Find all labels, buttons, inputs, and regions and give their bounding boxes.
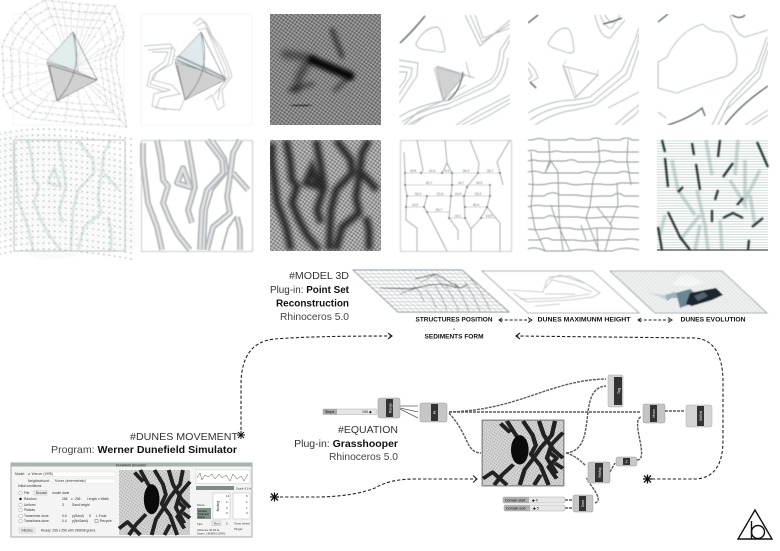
panel: row 2 network with measured distances: 14.7: [458, 181, 464, 185]
node: surface grid: [686, 405, 712, 427]
simulator settings: 256: [62, 497, 68, 501]
panel: row 1 large contour: [658, 14, 768, 125]
simulator plots and controls: [196, 470, 252, 536]
simulator settings: 0.6: [62, 514, 67, 518]
panel: Dunefield simulator window: Dunefield simulator: [116, 463, 147, 467]
simulator plots and controls: Surface: [198, 509, 207, 513]
arrow: height to evolution: [638, 318, 672, 322]
panel: row 2 network with measured distances: 14.1: [455, 214, 461, 218]
panel: row 2 network with measured distances: 14.0: [476, 181, 482, 185]
panel: row 1 contours with triangle outline: [528, 15, 639, 125]
panel: row 2 network with measured distances: 34.4: [463, 169, 469, 173]
arrow: simulator to equation: [280, 476, 477, 497]
simulator settings: x: [71, 497, 73, 501]
simulator plots and controls: 5: [246, 494, 248, 498]
simulator settings: Transverse dune: [24, 514, 49, 518]
panel: row 2 dark dune map: [270, 140, 381, 251]
text block: dunes movement: [51, 431, 239, 456]
simulator settings: Initial conditions: [18, 484, 42, 488]
panel: row 2 network with measured distances: 14.9: [412, 203, 418, 207]
panel: row 2 network with measured distances: 13.9: [486, 214, 492, 218]
panel: row 1 contours with grey triangle: [399, 15, 510, 125]
node: point: Pt: [433, 410, 437, 414]
simulator settings: Neighborhood:: [28, 479, 50, 483]
node: negative: [616, 457, 637, 466]
node: tag: Tag: [617, 388, 621, 394]
simulator settings: L.Frost: [96, 514, 106, 518]
simulator plots and controls: 6: [226, 500, 228, 504]
panel: row 2 network with measured distances: 30.4: [473, 203, 479, 207]
simulator plots and controls: 0: [226, 511, 228, 515]
text block: model 3D: Rhinoceros 5.0: [280, 311, 349, 323]
node: measure: [643, 404, 665, 423]
node: tag: [608, 375, 623, 407]
panel: row 2 dune contours: [142, 140, 252, 252]
text block: equation: [294, 424, 398, 463]
panel: row 2 network with measured distances: 42.7: [426, 181, 432, 185]
simulator dune image: [119, 470, 190, 535]
node: remap: [588, 462, 610, 483]
simulator plots and controls: Depth: [198, 515, 205, 519]
simulator settings: 256: [75, 497, 81, 501]
panel: row 2 network with measured distances: 13.4: [455, 192, 461, 196]
panel: row 2 network with measured distances: [400, 140, 512, 252]
text block: equation: #EQUATION: [338, 424, 398, 436]
wires: [400, 379, 684, 508]
text block: dunes movement: Program: Werner Dunefield Simulator: [51, 444, 237, 456]
text block: equation: Rhinoceros 5.0: [329, 451, 398, 463]
panel: row 1 point grid with wireframe: [2, 0, 127, 127]
panel: row 2 network with measured distances: 19.9: [410, 169, 416, 173]
arrow: equation to model: [516, 333, 723, 479]
panel: row 2 wavy section lines: [528, 138, 639, 251]
simulator settings: Ready: 256 x 256 with 196608 grains: [41, 528, 96, 532]
node: point: [420, 403, 447, 422]
slider: domain start: ◆ 0: [532, 498, 538, 502]
slider: steps: [323, 409, 377, 414]
label: dash: -: [453, 327, 455, 333]
simulator settings: p(Sand): [72, 514, 84, 518]
icon: asterisk right: [643, 474, 652, 484]
simulator plots and controls: Target: [234, 527, 243, 531]
diagram: grasshopper node graph: [323, 375, 712, 512]
node: surface grid: SrfGrid: [699, 411, 703, 421]
label: sediments form: SEDIMENTS FORM: [424, 334, 484, 340]
simulator plots and controls: Display: [216, 501, 220, 512]
slider: domain end: [504, 505, 565, 511]
simulator settings: Uniform: [24, 503, 36, 507]
node: range: Range: [388, 403, 392, 413]
panel: row 2 network with measured distances: 21.6: [437, 192, 443, 196]
simulator settings: model dune: [52, 491, 69, 495]
simulator settings: p(NoSand): [72, 519, 88, 523]
simulator plots and controls: Show: [197, 503, 205, 507]
simulator settings: 5: [89, 514, 91, 518]
simulator settings: Length x Width: [87, 497, 109, 501]
simulator settings: Recycle: [100, 519, 112, 523]
simulator settings: Initialize: [21, 528, 33, 532]
surface: dunes maximum height: [482, 271, 639, 313]
slider: steps: 190 ◆: [362, 410, 373, 414]
simulator plots and controls: Run: [214, 522, 220, 526]
label: dunes maximum height: DUNES MAXIMUNM HEIGHT: [538, 318, 631, 324]
panel: row 2 network with measured distances: 9.1: [445, 169, 449, 173]
simulator plots and controls: 3: [226, 506, 228, 510]
panel: row 2 network with measured distances: 16.7: [487, 169, 493, 173]
text block: equation: Plug-in: Grasshooper: [294, 438, 398, 450]
simulator plots and controls: 5: [226, 522, 228, 526]
text block: dunes movement: #DUNES MOVEMENT: [130, 431, 239, 443]
text block: model 3D: #MODEL 3D: [289, 270, 349, 282]
arrow: position to height: [499, 318, 532, 322]
node: domain: [573, 495, 593, 512]
simulator plots and controls: Influence 30 00 fa: [197, 528, 220, 532]
panel: row 2 network with measured distances: 14.4: [429, 169, 435, 173]
simulator settings: Moore (deterministic): [55, 479, 86, 483]
simulator settings: Model:: [15, 472, 25, 476]
arrow: dunes movement to model: [241, 333, 392, 430]
label: structures position: STRUCTURES POSITION: [416, 318, 492, 324]
text block: model 3D: Reconstruction: [276, 298, 349, 310]
icon: asterisk left: [270, 492, 279, 502]
simulator settings: Browse: [36, 491, 47, 495]
simulator settings: Sand height: [72, 503, 90, 507]
simulator settings: Plateau: [24, 508, 35, 512]
simulator settings: File: [24, 491, 29, 495]
simulator settings: Trans/trans dune: [24, 519, 49, 523]
node: domain: Dom: [581, 500, 585, 507]
node: remap: ReMap: [598, 467, 602, 478]
image sampler preview: [482, 420, 564, 486]
simulator settings: 0.4: [62, 519, 67, 523]
slider: domain end: ◆ 5: [533, 506, 539, 510]
simulator plots and controls: 1: [246, 500, 248, 504]
logo: triangle with b: [738, 510, 772, 539]
panel: row 2 network with measured distances: 16.3: [415, 192, 421, 196]
slider: domain start: Domain start: [505, 498, 525, 502]
panel: row 2 point grid over dunes: [0, 129, 136, 260]
simulator plots and controls: 1: [246, 506, 248, 510]
simulator plots and controls: Scale 9.1%: [236, 486, 252, 490]
simulator plots and controls: 12: [226, 494, 230, 498]
panel: Dunefield simulator window: [11, 463, 252, 537]
simulator plots and controls: Tons/ wheel: [234, 522, 250, 526]
panel: row 2 dark-on-white dune gradient: [657, 140, 768, 251]
node: measure: Mean: [652, 409, 656, 417]
label: dunes evolution: DUNES EVOLUTION: [680, 318, 746, 324]
simulator settings: a. Werner (1995): [28, 472, 53, 476]
icon: asterisk heading: [237, 431, 245, 439]
slider: domain end: Domain end: [506, 506, 525, 510]
simulator plots and controls: 0: [246, 511, 248, 515]
panel: row 1 contours with wireframe: [141, 14, 252, 125]
node: range: [378, 398, 400, 418]
surface: structures position: [353, 270, 509, 312]
simulator settings: [15, 472, 115, 533]
simulator plots and controls: Sediment: [198, 512, 209, 516]
slider: steps: Steps: [325, 410, 334, 414]
simulator plots and controls: Grans: 196608 (100%): [197, 532, 225, 536]
simulator settings: 3: [62, 503, 64, 507]
slider: domain start: [503, 497, 565, 503]
text block: model 3D: Plug-in: Point Set: [270, 284, 349, 296]
panel: row 2 network with measured distances: 23.4: [475, 192, 481, 196]
simulator plots and controls: Tips: [197, 522, 203, 526]
panel: row 2 network with measured distances: 20.7: [436, 208, 442, 212]
text block: model 3D: [270, 270, 349, 323]
simulator settings: Random: [24, 497, 37, 501]
panel: row 1 dark height map: [270, 14, 381, 125]
node: negative: Z: [625, 460, 628, 464]
surface: dunes evolution: [610, 271, 767, 313]
